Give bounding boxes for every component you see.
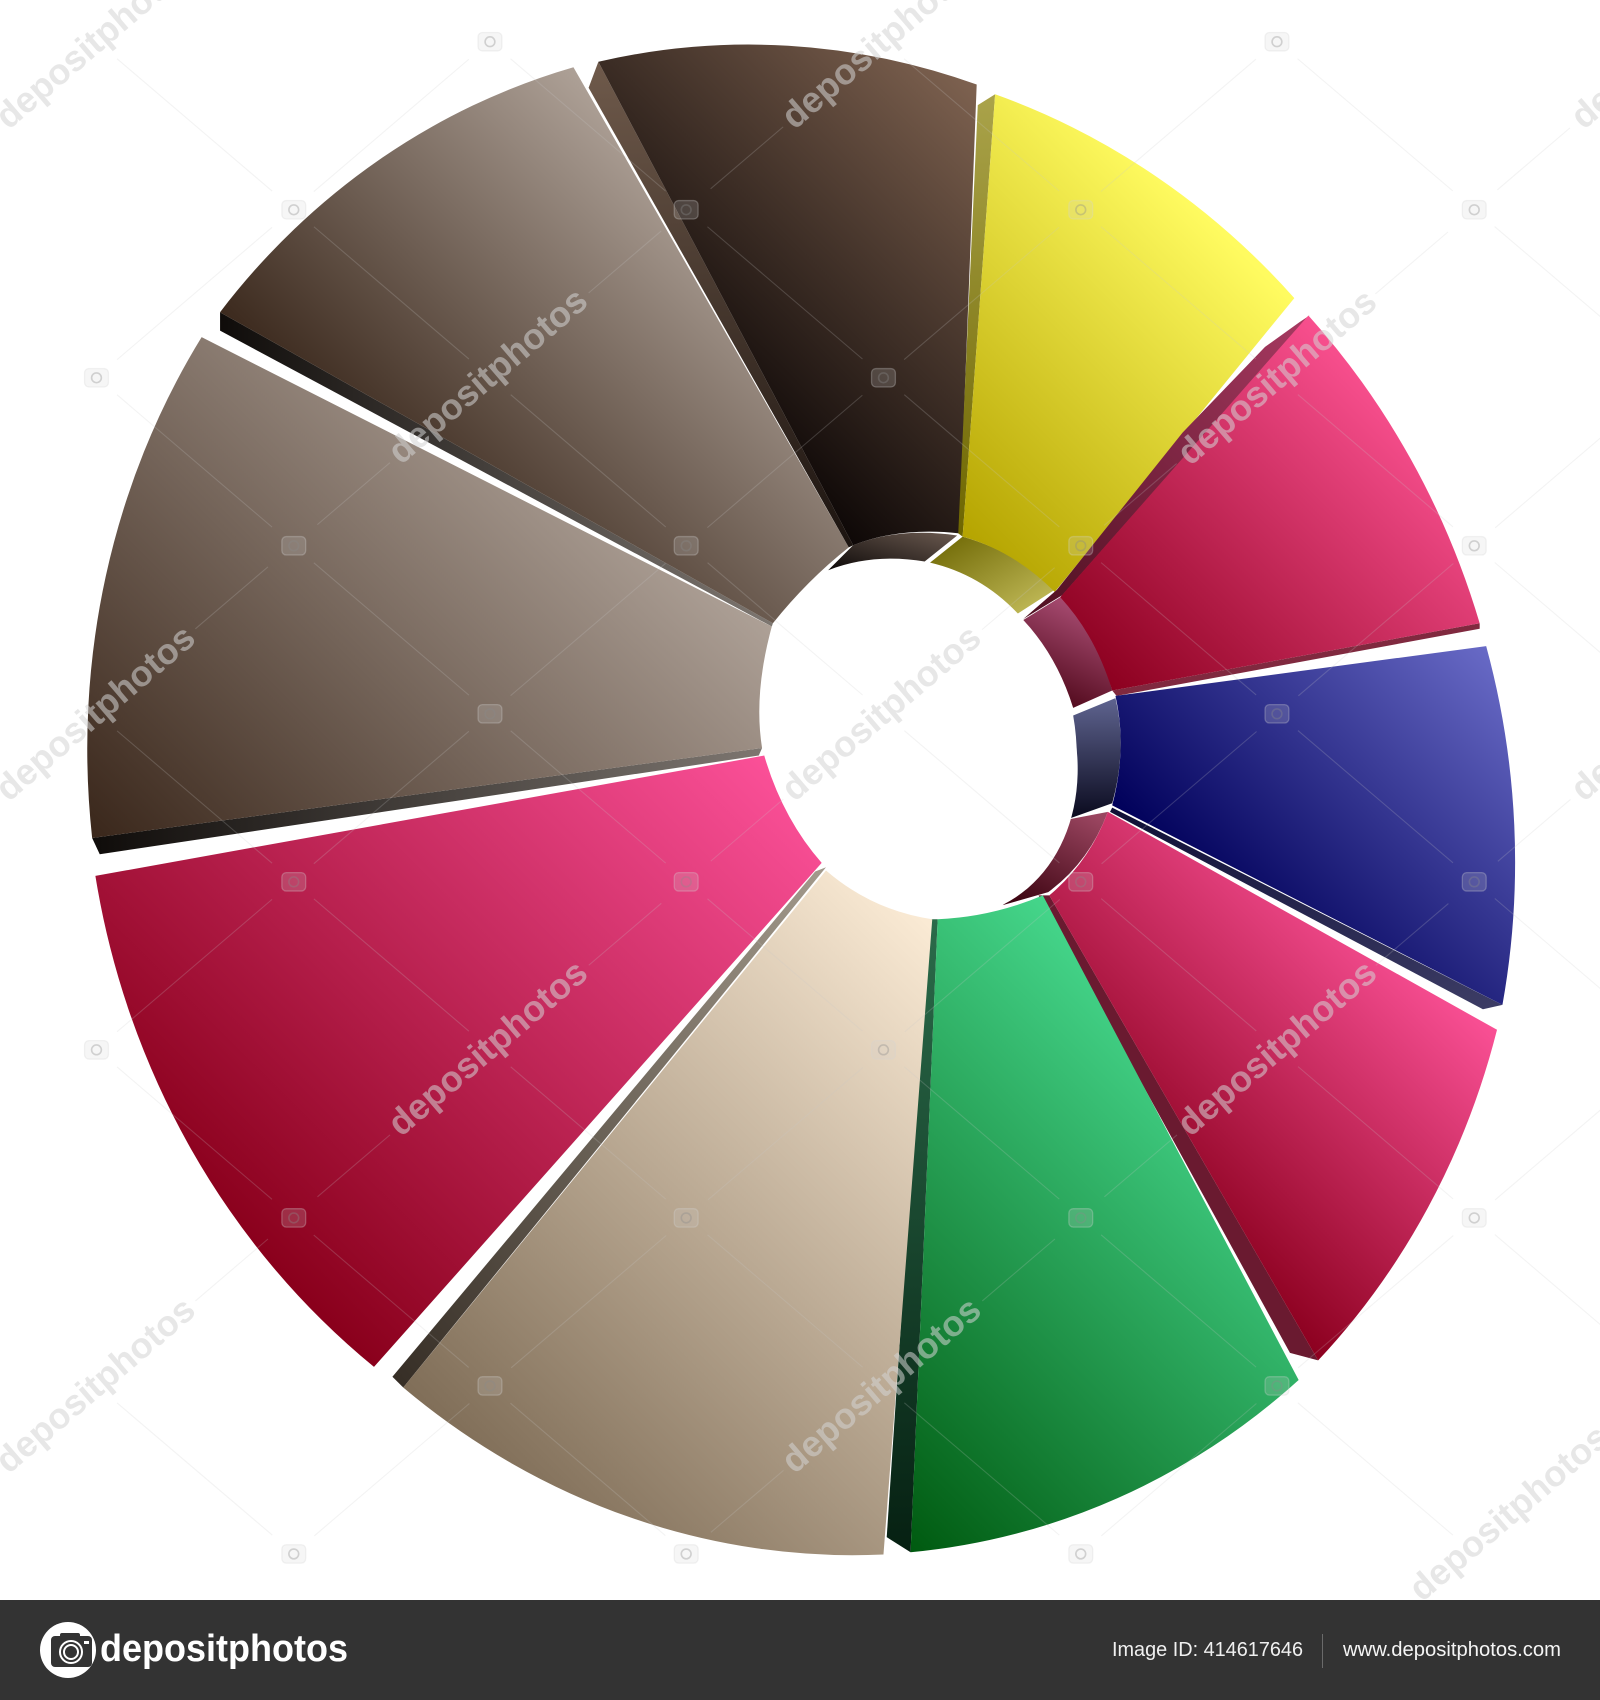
inner wall: navy: [1070, 698, 1121, 818]
segment: upper taupe: [220, 67, 849, 627]
icon: camera logo: [40, 1622, 96, 1678]
inner wall: upper pink: [1023, 597, 1112, 708]
website url: www.depositphotos.com: [1342, 1639, 1561, 1661]
watermark grid: depositphotos: [773, 616, 989, 809]
watermark grid: depositphotos: [379, 279, 595, 472]
watermark grid: depositphotos: [773, 1288, 989, 1481]
watermark camera icons: [85, 33, 1486, 1563]
segment: navy: [1110, 646, 1515, 1009]
image id: Image ID: 414617646: [1112, 1639, 1303, 1661]
segment: left taupe: [87, 337, 772, 854]
logo wordmark: depositphotos: [100, 1628, 348, 1670]
segment: large pink: [95, 756, 822, 1367]
inner wall: yellow: [930, 537, 1055, 614]
segment: upper pink: [1023, 315, 1480, 696]
footer bar: [0, 1600, 1600, 1700]
watermark grid: depositphotos: [1169, 280, 1384, 473]
divider: [1322, 1634, 1323, 1668]
watermark grid: depositphotos: [379, 951, 595, 1144]
inner wall: dark brown: [828, 533, 957, 570]
segment: lower pink: [1038, 812, 1497, 1360]
segment: beige: [392, 867, 932, 1555]
segment: yellow: [958, 94, 1294, 592]
inner wall: lower pink: [1003, 812, 1108, 905]
watermark grid: depositphotos: [1169, 951, 1384, 1144]
segment: green: [887, 895, 1299, 1552]
segment: dark brown: [589, 45, 977, 547]
donut hole: [701, 506, 1138, 973]
